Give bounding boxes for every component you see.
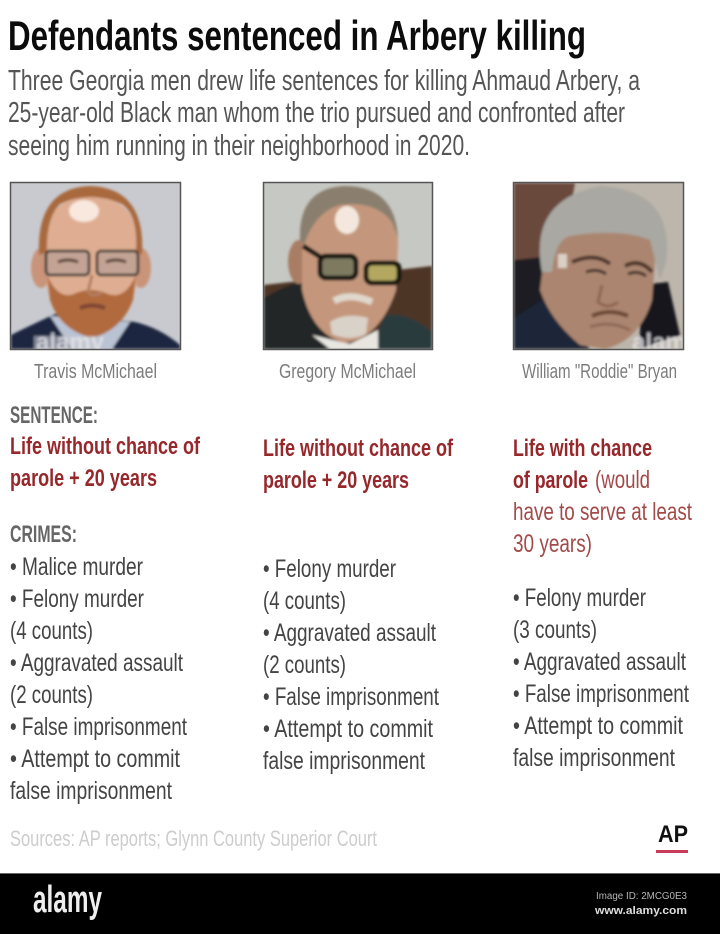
sentence: William Bryan: of parole <box>513 467 588 494</box>
photo: Gregory McMichael <box>263 182 433 350</box>
crimes list: Gregory McMichael: • Felony murder <box>263 555 396 583</box>
crimes list: Gregory McMichael: (2 counts) <box>263 651 346 679</box>
sentence: Travis McMichael: parole + 20 years <box>10 465 157 492</box>
name: Gregory McMichael: Gregory McMichael <box>279 361 416 383</box>
heading: crimes: CRIMES: <box>10 521 77 548</box>
crimes list: Gregory McMichael <box>263 555 439 775</box>
alamy url: www.alamy.com <box>594 905 687 917</box>
sentence: Gregory McMichael: Life without chance of <box>263 435 454 462</box>
sentence: Gregory McMichael: parole + 20 years <box>263 467 409 494</box>
sentence: William Bryan: 30 years) <box>513 530 592 558</box>
alamy footer band <box>0 873 720 934</box>
heading: sentence: SENTENCE: <box>10 402 98 429</box>
crimes list: William Bryan: (3 counts) <box>513 616 597 644</box>
crimes list: Gregory McMichael: false imprisonment <box>263 747 425 775</box>
crimes list: Gregory McMichael: • Attempt to commit <box>263 715 433 743</box>
crimes list: Travis McMichael: • False imprisonment <box>10 713 187 741</box>
alamy logo: alamy <box>33 879 102 921</box>
crimes list: Travis McMichael: • Aggravated assault <box>10 649 183 677</box>
photo: William Bryan: alam <box>632 329 687 356</box>
crimes list: Travis McMichael: false imprisonment <box>10 777 172 805</box>
crimes list: Gregory McMichael: (4 counts) <box>263 587 346 615</box>
name: Travis McMichael: Travis McMichael <box>34 361 157 383</box>
photo: William Bryan <box>513 182 687 356</box>
crimes list: Travis McMichael: (4 counts) <box>10 617 93 645</box>
crimes list: William Bryan <box>513 584 689 772</box>
crimes list: Travis McMichael: • Attempt to commit <box>10 745 180 773</box>
photo: Travis McMichael: alamy <box>36 329 105 356</box>
sentence: William Bryan: Life with chance <box>513 435 652 462</box>
intro text: seeing him running in their neighborhood in 2020. <box>8 130 470 162</box>
crimes list: Travis McMichael: • Felony murder <box>10 585 144 613</box>
crimes list: Travis McMichael: • Malice murder <box>10 553 143 581</box>
sentence: William Bryan <box>513 435 692 558</box>
AP logo: AP <box>658 821 688 848</box>
intro text <box>8 65 641 162</box>
crimes list: Travis McMichael <box>10 553 187 805</box>
crimes list: William Bryan: false imprisonment <box>513 744 675 772</box>
sentence: Travis McMichael <box>10 433 201 492</box>
sentence: William Bryan: (would <box>595 466 650 494</box>
sentence: Travis McMichael: Life without chance of <box>10 433 201 460</box>
sources: Sources: AP reports; Glynn County Superior Court <box>10 826 377 851</box>
photo: Travis McMichael <box>10 182 181 356</box>
sentence: Gregory McMichael <box>263 435 454 494</box>
crimes list: Gregory McMichael: • Aggravated assault <box>263 619 436 647</box>
crimes list: Travis McMichael: (2 counts) <box>10 681 93 709</box>
crimes list: William Bryan: • Felony murder <box>513 584 646 612</box>
image id: Image ID: 2MCG0E3 <box>596 891 687 902</box>
crimes list: Gregory McMichael: • False imprisonment <box>263 683 439 711</box>
